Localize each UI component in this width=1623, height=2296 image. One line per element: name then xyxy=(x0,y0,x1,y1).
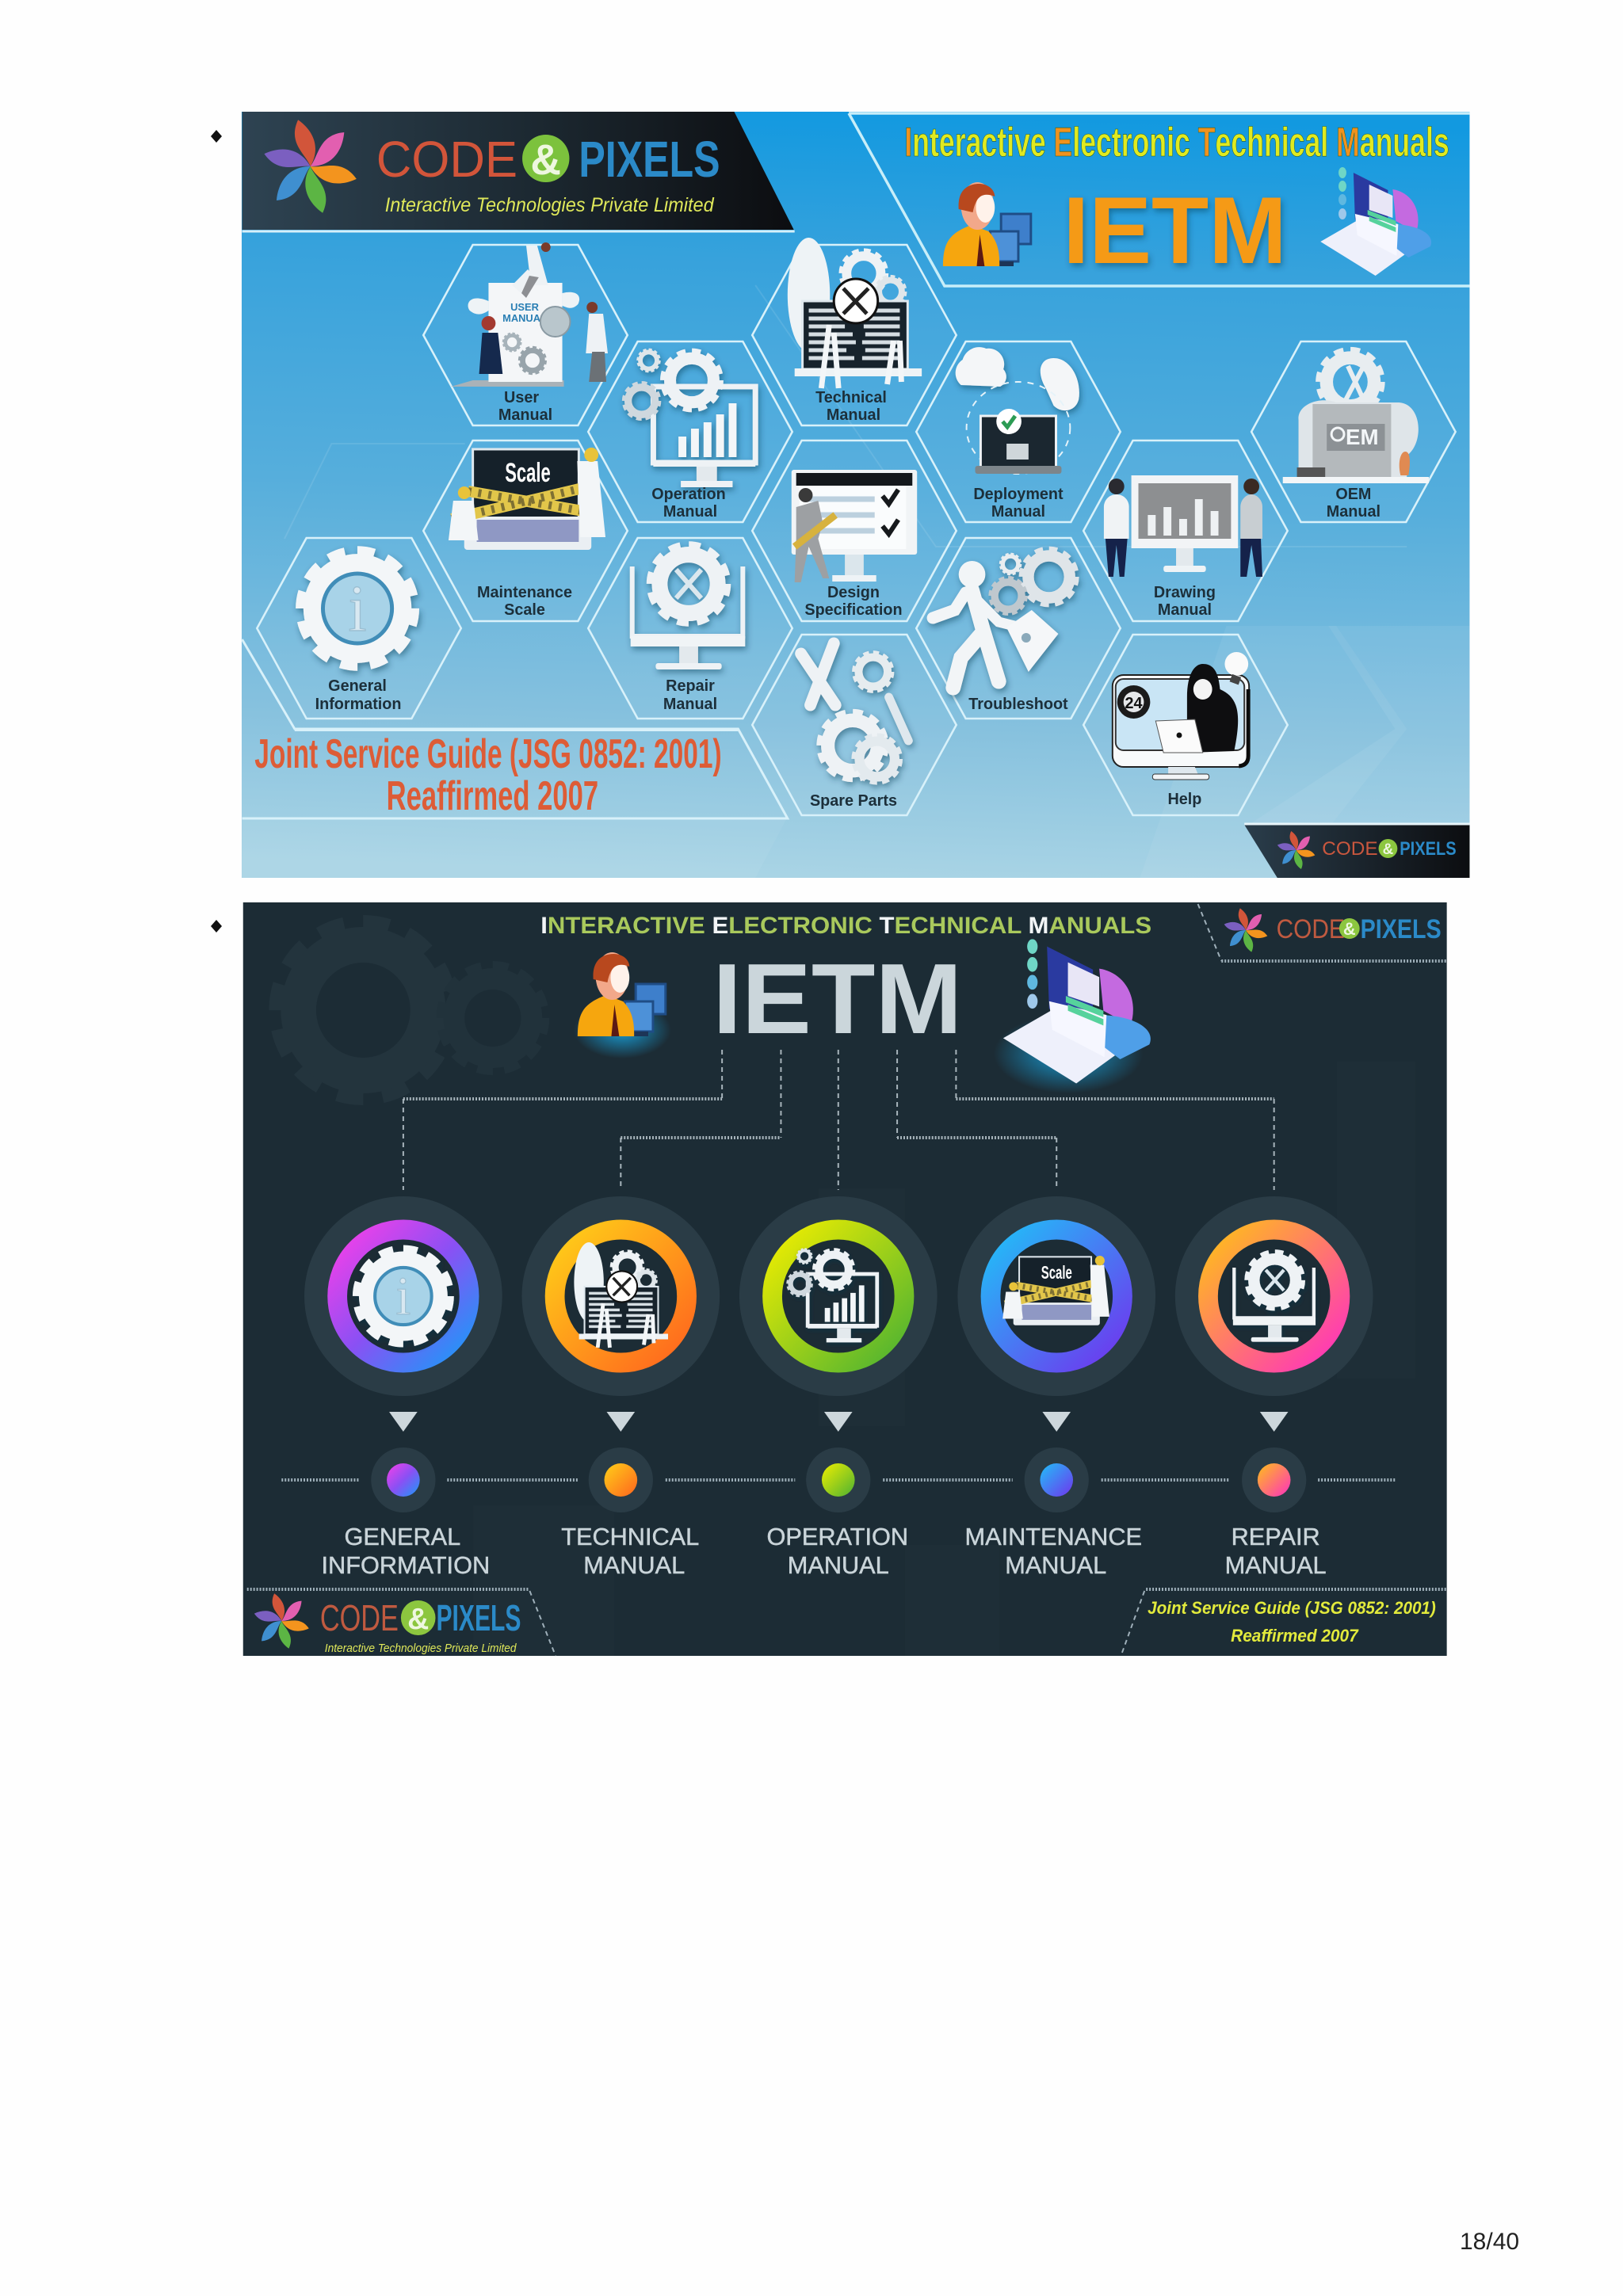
title: interactive electronic technical manuals: INTERACTIVE ELECTRONIC TECHNICAL MANUALS xyxy=(540,913,1151,939)
hexagon: Troubleshoot xyxy=(916,538,1121,719)
label: General xyxy=(328,677,387,695)
text: reaffirmed: Reaffirmed 2007 xyxy=(1231,1626,1359,1646)
icon: laptop with files xyxy=(994,939,1151,1093)
timeline dot xyxy=(371,1447,435,1512)
arrow xyxy=(824,1412,853,1432)
label: MANUAL xyxy=(1225,1551,1327,1579)
node: Repair Manual xyxy=(1175,1196,1373,1579)
horizontal dotted timeline xyxy=(281,1478,1396,1482)
label: REPAIR xyxy=(1232,1523,1320,1550)
text: standard name: Joint Service Guide (JSG 0852: 2001) xyxy=(1148,1598,1436,1618)
hexagon: User Manual: USER xyxy=(510,301,540,313)
hexagon: Operation Manual xyxy=(588,341,792,522)
bottom left logo xyxy=(247,1589,556,1656)
hexagon: Drawing Manual xyxy=(1083,441,1288,621)
timeline dot xyxy=(1242,1447,1306,1512)
panel: IETM hexagon infographic xyxy=(242,112,1469,878)
tagline: Interactive Technologies Private Limited xyxy=(325,1642,517,1655)
label: Manual xyxy=(827,406,880,424)
hexagon: Design Specification xyxy=(752,441,957,621)
background gear watermark xyxy=(279,925,544,1095)
header: IETM title block xyxy=(849,113,1469,286)
label: Manual xyxy=(991,503,1045,521)
arrow xyxy=(389,1412,418,1432)
hexagon: User Manual xyxy=(423,242,628,425)
arrow xyxy=(1260,1412,1289,1432)
heading: IETM: IETM xyxy=(1063,177,1287,284)
label: Maintenance xyxy=(477,584,572,601)
label: MAINTENANCE xyxy=(965,1523,1142,1550)
label: Scale xyxy=(504,601,545,619)
hexagon: OEM Manual: EM xyxy=(1346,425,1379,449)
timeline dot xyxy=(806,1447,870,1512)
label: Technical xyxy=(815,389,887,406)
logo text CODE: CODE xyxy=(1277,914,1345,944)
label: MANUAL xyxy=(583,1551,685,1579)
label: Specification xyxy=(804,601,903,619)
label: Design xyxy=(827,584,880,601)
label: User xyxy=(504,389,539,406)
ampersand badge: & xyxy=(1383,841,1394,858)
hexagon: OEM Manual xyxy=(1251,341,1456,522)
hexagon: General Information xyxy=(257,538,461,719)
callout: Joint Service Guide xyxy=(242,639,788,818)
icon: pinwheel logo xyxy=(262,120,358,213)
header: company logo banner xyxy=(242,112,795,231)
label: TECHNICAL xyxy=(561,1523,699,1550)
label: MANUAL xyxy=(788,1551,889,1579)
ampersand badge xyxy=(1339,918,1360,939)
icon: pinwheel xyxy=(1277,831,1316,869)
ampersand badge: & xyxy=(407,1603,429,1636)
label: Manual xyxy=(663,503,717,521)
label: Information xyxy=(315,696,401,713)
hexagon: Deployment Manual xyxy=(916,341,1121,522)
icon: engineer with monitors xyxy=(574,952,671,1058)
bullet marker 1 xyxy=(211,130,222,143)
label: Help xyxy=(1167,791,1201,808)
label: OEM xyxy=(1335,486,1371,503)
title: Interactive Electronic Technical Manuals: Interactive Electronic Technical Manuals xyxy=(904,119,1449,165)
logo text CODE: CODE xyxy=(1322,838,1378,860)
icon: pinwheel xyxy=(1224,908,1268,952)
logo text PIXELS: PIXELS xyxy=(436,1598,521,1638)
timeline dot xyxy=(589,1447,653,1512)
bottom right standard note xyxy=(1121,1589,1447,1656)
logo ampersand badge xyxy=(522,135,569,184)
ampersand badge xyxy=(1379,839,1397,858)
icon: pinwheel xyxy=(254,1593,310,1649)
text: standard name: Joint Service Guide (JSG 0852: 2001) xyxy=(254,730,722,776)
page number: 18/40 xyxy=(1460,2229,1519,2255)
text: reaffirmed: Reaffirmed 2007 xyxy=(387,772,598,818)
label: GENERAL xyxy=(345,1523,460,1550)
label: Manual xyxy=(498,406,552,424)
arrow xyxy=(1042,1412,1071,1432)
bullet marker 2 xyxy=(211,920,222,933)
ampersand badge: & xyxy=(1343,919,1356,939)
label: Operation xyxy=(651,486,726,503)
hexagon: Repair Manual xyxy=(588,538,792,719)
hexagon: Technical Manual xyxy=(752,238,957,425)
label: MANUAL xyxy=(1005,1551,1106,1579)
hexagon: Help: 24 xyxy=(1125,695,1143,712)
ampersand badge xyxy=(401,1600,435,1636)
hexagon: Maintenance Scale xyxy=(423,441,628,621)
connector lines xyxy=(403,1050,1274,1190)
top right logo xyxy=(1198,904,1447,961)
footer logo badge xyxy=(1244,824,1469,878)
label: Manual xyxy=(663,696,717,713)
logo word PIXELS: PIXELS xyxy=(579,132,720,188)
node: Maintenance Manual xyxy=(957,1196,1155,1579)
label: Repair xyxy=(666,677,715,695)
logo word CODE: CODE xyxy=(376,132,517,188)
arrow xyxy=(606,1412,635,1432)
label: Troubleshoot xyxy=(968,696,1068,713)
hexagon: User Manual: MANUAL xyxy=(502,312,547,324)
hexagon: Help xyxy=(1083,635,1288,815)
label: Manual xyxy=(1158,601,1212,619)
label: Spare Parts xyxy=(810,792,897,810)
node: Operation Manual xyxy=(739,1196,938,1579)
logo text CODE: CODE xyxy=(320,1598,399,1638)
panel: IETM dark flow diagram xyxy=(243,902,1447,1656)
timeline dot xyxy=(1025,1447,1089,1512)
icon: engineer with monitors xyxy=(943,182,1031,266)
heading: IETM: IETM xyxy=(712,942,962,1055)
logo ampersand badge: & xyxy=(530,136,561,184)
logo text PIXELS: PIXELS xyxy=(1361,914,1442,944)
node: Technical Manual xyxy=(521,1196,720,1579)
logo text PIXELS: PIXELS xyxy=(1400,838,1457,860)
logo tagline: Interactive Technologies Private Limited xyxy=(385,194,715,216)
hexagon: Spare Parts xyxy=(752,635,957,815)
label: Manual xyxy=(1327,503,1381,521)
icon: laptop with files xyxy=(1320,167,1431,276)
label: Drawing xyxy=(1154,584,1216,601)
node: General Information xyxy=(304,1196,502,1579)
label: OPERATION xyxy=(767,1523,908,1550)
label: Deployment xyxy=(973,486,1064,503)
label: INFORMATION xyxy=(322,1551,490,1579)
